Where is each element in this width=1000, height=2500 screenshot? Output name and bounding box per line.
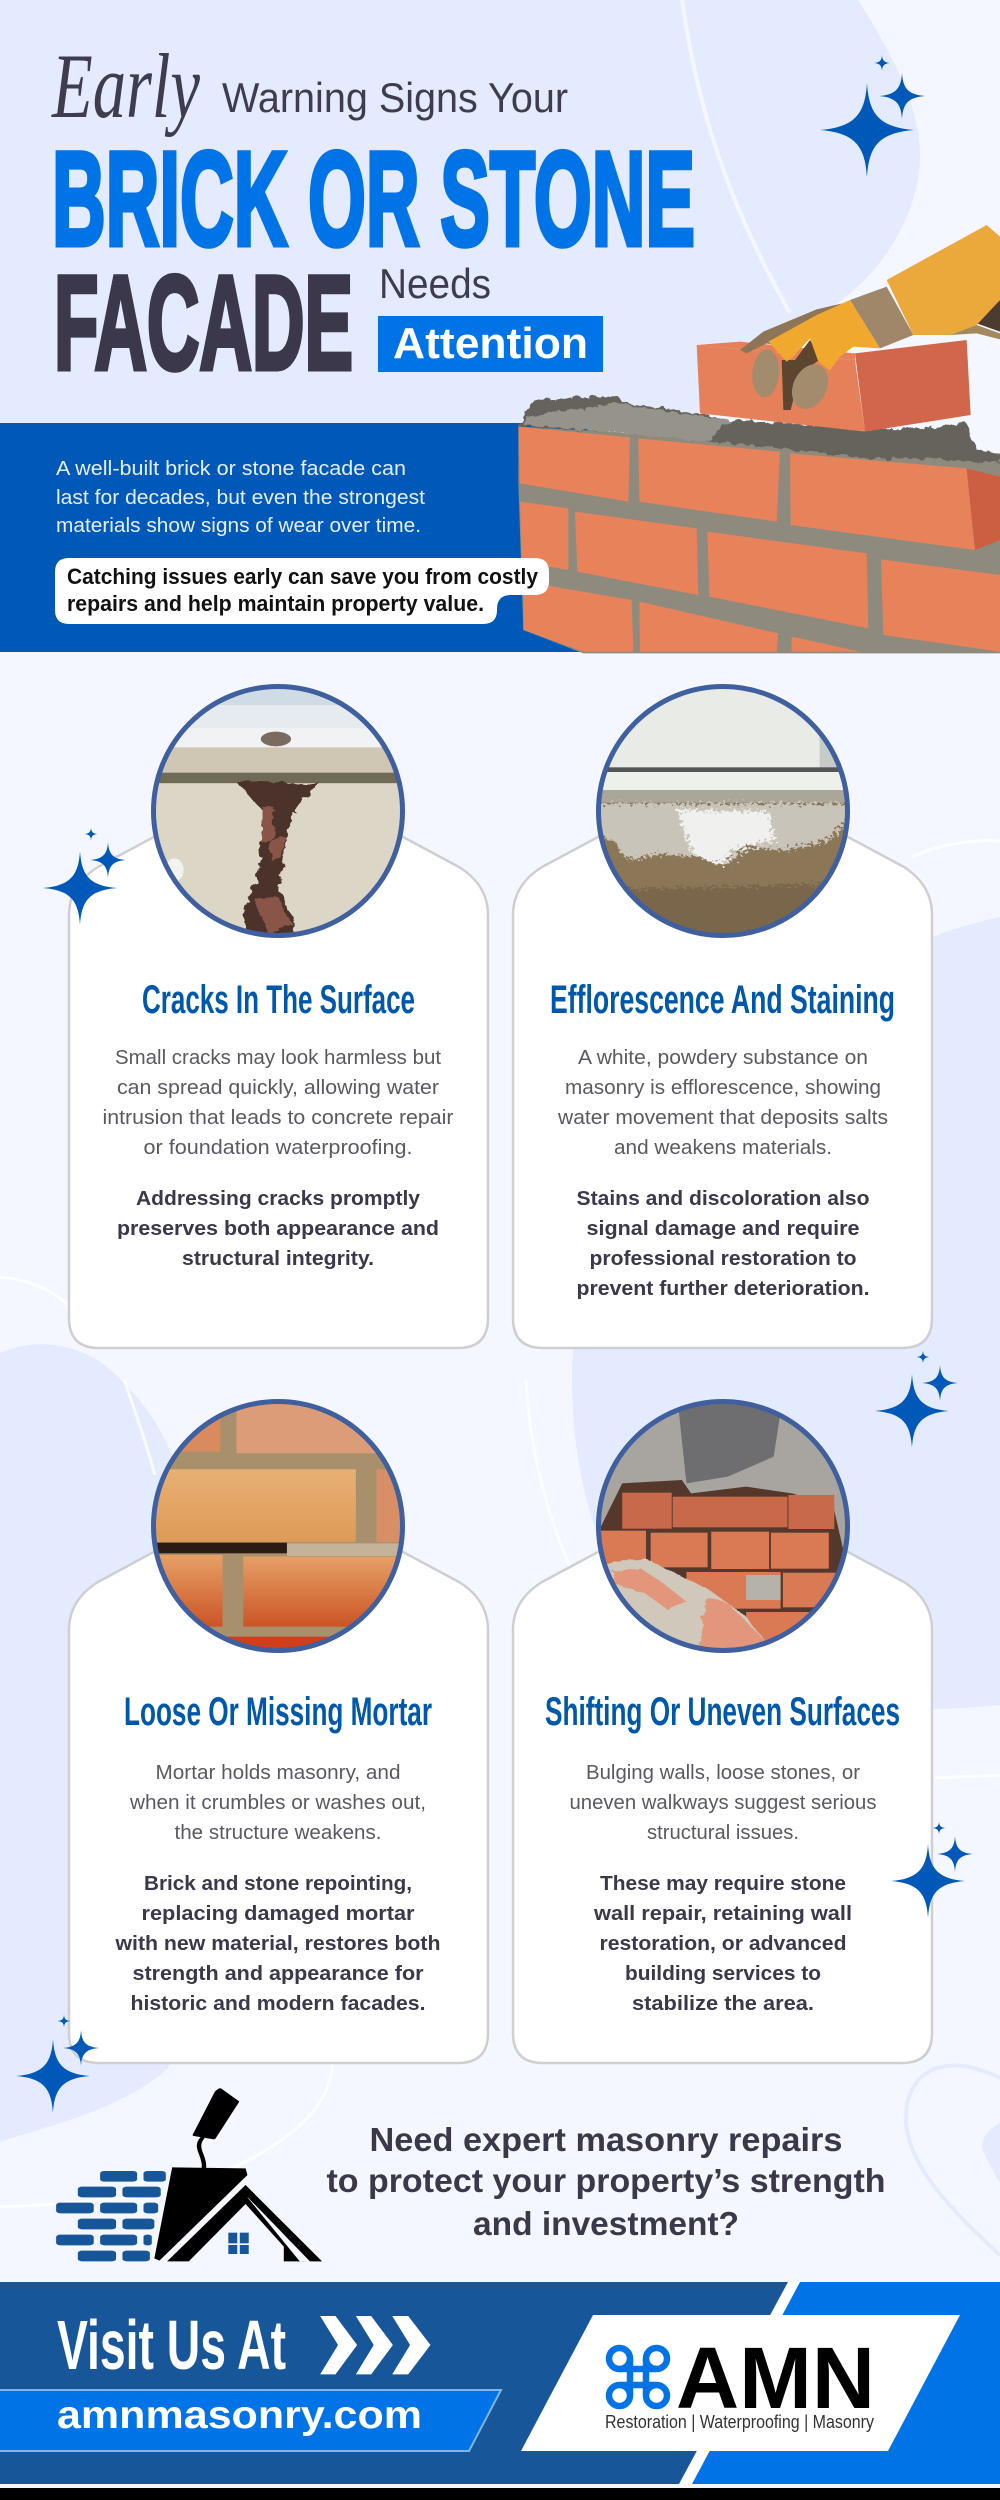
body text: when it crumbles or washes out, — [129, 1792, 426, 1814]
bold text: building services to — [625, 1963, 821, 1985]
heading: Cracks In The Surface — [142, 978, 415, 1022]
icon: sparkles lower right — [891, 1822, 973, 1918]
body text: or foundation waterproofing. — [144, 1137, 412, 1159]
callout: catching issues early: Catching issues early can save you from costly — [67, 564, 539, 589]
icon: sparkles top right — [820, 55, 925, 177]
callout: catching issues early: repairs and help maintain property value. — [67, 591, 484, 616]
icon: trowel, bricks and house — [56, 2089, 322, 2261]
brick wall and gloved hand image — [518, 225, 1000, 653]
bold text: historic and modern facades. — [130, 1993, 426, 2015]
intro paragraph — [56, 458, 425, 537]
call to action text: to protect your property’s strength — [326, 2162, 886, 2199]
title: early warning signs — [51, 35, 568, 137]
bold text — [593, 1873, 852, 2015]
card outline — [513, 1485, 932, 2063]
body text: Small cracks may look harmless but — [115, 1047, 441, 1069]
visit us at: Visit Us At — [57, 2306, 286, 2384]
body text: Mortar holds masonry, and — [156, 1762, 400, 1784]
body text — [129, 1762, 426, 1844]
card outline — [69, 1485, 488, 2063]
body text: uneven walkways suggest serious — [570, 1792, 876, 1814]
bold text: signal damage and require — [586, 1218, 860, 1240]
icon: sparkles middle right — [875, 1350, 958, 1448]
website bar — [0, 2390, 501, 2451]
panel: loose or missing mortar — [69, 1397, 488, 2063]
photo: crack in wall — [140, 680, 416, 940]
body text — [557, 1047, 888, 1159]
bold text — [114, 1873, 440, 2015]
heading: Loose Or Missing Mortar — [124, 1690, 432, 1734]
photo: brick with missing mortar — [151, 1399, 405, 1653]
body text — [570, 1762, 876, 1844]
photo: efflorescence — [595, 680, 852, 947]
panel: cracks in the surface — [69, 680, 488, 1348]
icon: chevrons — [320, 2316, 430, 2374]
title: early warning signs: Warning Signs Your — [222, 74, 568, 121]
icon: logo knot — [609, 2348, 667, 2406]
callout: catching issues early — [55, 558, 549, 624]
intro band — [0, 423, 590, 652]
bold text: wall repair, retaining wall — [593, 1903, 852, 1925]
bold text: replacing damaged mortar — [142, 1903, 415, 1925]
body text: can spread quickly, allowing water — [117, 1077, 439, 1099]
photo: exposed crumbling bricks — [595, 1397, 852, 1663]
footer band — [0, 2282, 1000, 2500]
body text: and weakens materials. — [614, 1137, 832, 1159]
title: early warning signs: Early — [51, 35, 200, 137]
body text: masonry is efflorescence, showing — [565, 1077, 881, 1099]
call to action text: and investment? — [473, 2205, 739, 2242]
bold text: strength and appearance for — [132, 1963, 424, 1985]
title: facade: FACADE — [54, 249, 353, 398]
bold text — [576, 1188, 870, 1300]
logo panel: Restoration | Waterproofing | Masonry — [605, 2412, 874, 2432]
bold text: structural integrity. — [182, 1248, 374, 1270]
bold text — [117, 1188, 439, 1270]
bold text: Stains and discoloration also — [576, 1188, 870, 1210]
logo panel: AMN — [676, 2330, 875, 2427]
title: needs: Needs — [379, 260, 491, 307]
bold text: stabilize the area. — [632, 1993, 814, 2015]
call to action text: Need expert masonry repairs — [370, 2121, 842, 2158]
intro paragraph: materials show signs of wear over time. — [56, 515, 421, 537]
icon: sparkles lower left — [16, 2014, 99, 2113]
card outline — [513, 770, 932, 1348]
logo panel — [521, 2315, 960, 2451]
bold text: with new material, restores both — [114, 1933, 440, 1955]
bold text: These may require stone — [600, 1873, 846, 1895]
body text: structural issues. — [647, 1822, 799, 1844]
body text: Bulging walls, loose stones, or — [586, 1762, 860, 1784]
bold text: preserves both appearance and — [117, 1218, 439, 1240]
body text — [102, 1047, 454, 1159]
call to action text — [326, 2121, 886, 2242]
body text: water movement that deposits salts — [557, 1107, 888, 1129]
body text: intrusion that leads to concrete repair — [102, 1107, 454, 1129]
panel: efflorescence and staining — [513, 680, 932, 1348]
bold text: prevent further deterioration. — [576, 1278, 870, 1300]
bold text: professional restoration to — [590, 1248, 856, 1270]
panel: shifting or uneven surfaces — [513, 1397, 932, 2063]
bold text: Brick and stone repointing, — [144, 1873, 412, 1895]
bold text: restoration, or advanced — [600, 1933, 846, 1955]
body text: the structure weakens. — [174, 1822, 382, 1844]
title: attention badge: Attention — [393, 319, 588, 368]
intro paragraph: A well-built brick or stone facade can — [56, 458, 406, 480]
card outline — [69, 770, 488, 1348]
intro paragraph: last for decades, but even the strongest — [56, 487, 425, 509]
bold text: Addressing cracks promptly — [136, 1188, 421, 1210]
body text: A white, powdery substance on — [578, 1047, 868, 1069]
website bar: amnmasonry.com — [57, 2394, 422, 2437]
icon: sparkles card one — [43, 828, 126, 925]
